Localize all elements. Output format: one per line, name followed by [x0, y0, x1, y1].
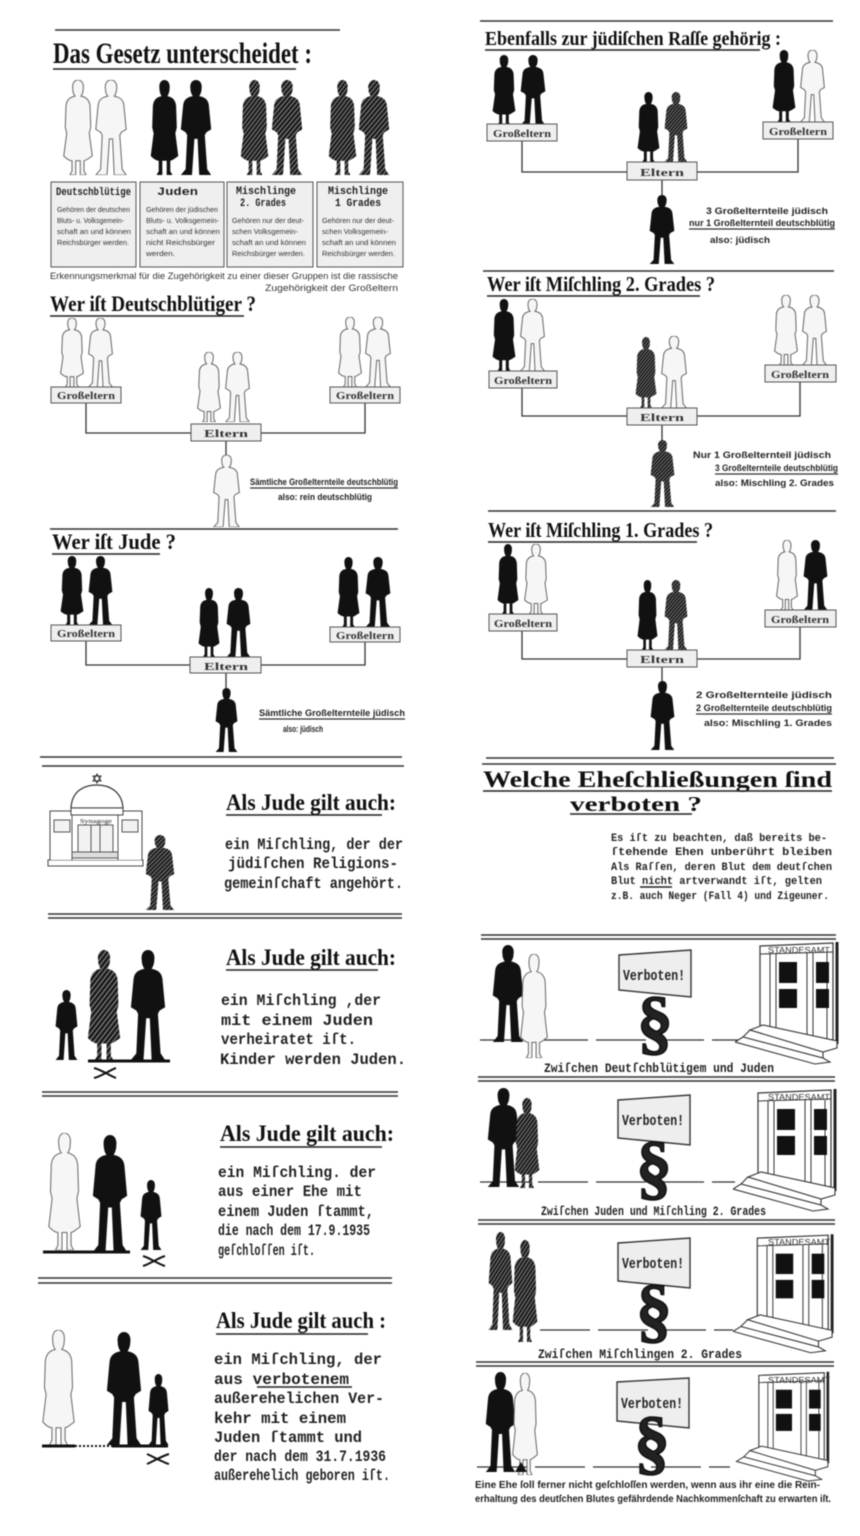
text [224, 836, 403, 893]
text [218, 1164, 376, 1260]
box: Juden: Juden [157, 187, 198, 199]
heading: Als Jude gilt auch: [226, 945, 396, 970]
text: verheiratet iſt. [221, 1031, 356, 1049]
icon: registry office [733, 1089, 835, 1211]
sign: Verboten: Verboten! [622, 1113, 684, 1130]
note text: Als Raſſen, deren Blut dem deutſchen [611, 862, 832, 874]
explanation: 3 Großelternteile jüdisch [706, 206, 828, 216]
box: Juden: werden. [145, 251, 175, 258]
sign: Verboten: § [637, 982, 673, 1062]
box: Mischlinge 2. Grades [227, 182, 313, 267]
text: ein Miſchling. der [218, 1164, 376, 1182]
box: Juden [140, 182, 224, 267]
text: der nach dem 31.7.1936 [214, 1448, 386, 1466]
note text: Blut nicht artverwandt iſt, gelten [611, 876, 822, 888]
text: aus verbotenem [214, 1371, 349, 1389]
box: Mischlinge 1. Grades [317, 182, 403, 267]
explanation: also: rein deutschblütig [278, 492, 372, 502]
explanation: nur 1 Großelternteil deutschblütig [689, 218, 835, 228]
explanation [696, 690, 832, 728]
text: ein Miſchling ,der [221, 992, 381, 1010]
sign: Verboten: Verboten! [621, 1396, 683, 1413]
family tree: Großeltern [493, 128, 551, 140]
sign: Verboten: Verboten! [623, 968, 685, 985]
text: ein Miſchling, der [214, 1351, 382, 1369]
box: Mischlinge 1. Grades: Gehören nur der deut- [322, 218, 395, 225]
heading: Wer iſt Jude ? [52, 529, 176, 554]
explanation: Sämtliche Großelternteile jüdisch [259, 708, 405, 718]
text: mit einem Juden [221, 1012, 373, 1030]
sign: Verboten [618, 1238, 690, 1350]
sign: Verboten [618, 1095, 690, 1207]
caption: Zwiſchen Juden und Miſchling 2. Grades [541, 1205, 766, 1219]
sign: Verboten: § [636, 1270, 672, 1350]
family tree: Großeltern [771, 369, 829, 381]
family tree: Großeltern [769, 126, 827, 138]
box: Mischlinge 2. Grades: schen Volksgemein- [232, 229, 299, 236]
icon: registry office: STANDESAMT [768, 1376, 830, 1385]
sign: Verboten [617, 1378, 689, 1482]
panel: Als Jude gilt auch, religious community [48, 774, 403, 918]
family tree: Großeltern [57, 628, 115, 640]
icon: synagogue: Synagoge [80, 819, 112, 825]
text [220, 992, 406, 1069]
family tree [489, 540, 836, 750]
panel: overview of the law's categories [50, 30, 403, 293]
panel: Wer ist Mischling 1. Grades [486, 518, 836, 758]
caption [475, 1480, 831, 1505]
text: geſchloſſen iſt. [218, 1242, 315, 1260]
caption: erhaltung des deutſchen Blutes gefährdende Nachkommenſchaft zu erwarten iſt. [475, 1494, 831, 1505]
text [214, 1351, 390, 1485]
icon: registry office: STANDESAMT [768, 1238, 830, 1247]
note text: ſtehende Ehen unberührt bleiben [611, 847, 832, 859]
icon: registry office [736, 1372, 830, 1481]
box: Juden: Gehören der jüdischen [146, 207, 218, 214]
panel: marriage case 3 [476, 1232, 834, 1366]
explanation: Sämtliche Großelternteile deutschblütig [250, 477, 398, 487]
heading: Wer iſt Miſchling 1. Grades ? [488, 518, 713, 542]
family tree: Eltern [640, 412, 684, 424]
family tree [489, 295, 836, 507]
sign: Verboten: § [634, 1402, 670, 1482]
box: Juden: nicht Reichsbürger [146, 240, 216, 247]
box: Juden: Bluts- u. Volksgemein- [146, 218, 220, 225]
panel: Ebenfalls zur jüdischen Rasse gehörig [480, 21, 835, 271]
family tree: Großeltern [494, 375, 552, 387]
icon: synagogue [48, 774, 143, 866]
figures: couple [488, 1088, 539, 1188]
family tree: Eltern [640, 654, 684, 666]
box: Mischlinge 1. Grades: Reichsbürger werden. [322, 251, 395, 258]
icon: registry office: STANDESAMT [768, 946, 830, 955]
icon: registry office [735, 942, 837, 1064]
icon: registry office [733, 1234, 832, 1353]
text: jüdiſchen Religions- [228, 855, 398, 873]
heading [483, 767, 832, 816]
explanation: Nur 1 Großelternteil jüdisch [693, 450, 831, 460]
sign: Verboten: Verboten! [622, 1256, 684, 1273]
box: Mischlinge 1. Grades: 1 Grades [335, 198, 381, 210]
family tree: Großeltern [57, 390, 115, 402]
sign: Verboten [619, 950, 691, 1062]
heading: Als Jude gilt auch: [226, 790, 396, 815]
explanation: 3 Großelternteile deutschblütig [715, 463, 838, 473]
family tree: Großeltern [336, 630, 394, 642]
figures: couple [493, 945, 547, 1058]
note on group membership: Erkennungsmerkmal für die Zugehörigkeit zu einer dieser Gruppen ist die rassische [50, 271, 398, 281]
text: die nach dem 17.9.1935 [218, 1222, 370, 1240]
explanation: 2 Großelternteile jüdisch [696, 690, 832, 700]
note on group membership [50, 271, 398, 293]
note text: Es iſt zu beachten, daß bereits be- [611, 833, 827, 845]
heading: Als Jude gilt auch : [216, 1308, 386, 1333]
family tree: Eltern [640, 167, 684, 179]
family tree [51, 556, 400, 752]
text: außerehelich geboren iſt. [214, 1467, 390, 1485]
text: aus einer Ehe mit [218, 1183, 362, 1201]
heading: Als Jude gilt auch: [220, 1121, 394, 1146]
panel: Als Jude gilt auch, married to a Jew [42, 945, 406, 1096]
caption: Zwiſchen Deutſchblütigem und Juden [544, 1061, 774, 1076]
figures [42, 1330, 169, 1464]
text: einem Juden ſtammt, [218, 1203, 374, 1221]
box: Deutschblütige: Reichsbürger werden. [57, 240, 129, 247]
figures: couple [486, 1372, 537, 1475]
panel: Welche Eheschließungen sind verboten [482, 764, 836, 903]
box: Mischlinge 2. Grades: schaft an und können [232, 240, 306, 247]
panel: marriage case 1 [478, 935, 837, 1081]
box: Deutschblütige: Bluts- u. Volksgemein- [57, 218, 125, 225]
caption: Zwiſchen Miſchlingen 2. Grades [538, 1348, 742, 1362]
note on group membership: Zugehörigkeit der Großeltern [265, 283, 398, 293]
note text [611, 833, 832, 903]
text: kehr mit einem [214, 1410, 346, 1428]
family tree [487, 50, 833, 264]
icon: registry office: STANDESAMT [768, 1093, 830, 1102]
box: Mischlinge 2. Grades: Mischlinge [236, 186, 296, 198]
family tree [51, 317, 400, 527]
box: Juden: schaft an und können [146, 229, 220, 236]
explanation: also: jüdisch [283, 724, 323, 734]
figures [43, 1133, 165, 1266]
sign: Verboten: § [636, 1127, 672, 1207]
heading: verboten ? [570, 792, 702, 816]
panel: Wer ist Mischling 2. Grades [487, 272, 838, 511]
heading: Ebenfalls zur jüdiſchen Raſſe gehörig : [485, 28, 781, 50]
panel: Als Jude gilt auch, extramarital birth after 31.7.1936 [42, 1308, 390, 1485]
explanation [259, 708, 405, 734]
figures: child and couple [56, 950, 170, 1078]
explanation [689, 206, 835, 245]
text: ein Miſchling, der der [225, 836, 403, 854]
panel: Wer ist Deutschblütiger [50, 291, 400, 529]
panel: Wer ist Jude [40, 529, 405, 757]
heading: Wer iſt Deutschblütiger ? [50, 291, 256, 316]
family tree: Großeltern [494, 618, 552, 630]
figure: person [146, 835, 174, 910]
box: Mischlinge 1. Grades: Mischlinge [328, 186, 388, 198]
family tree: Eltern [204, 428, 248, 440]
box: Mischlinge 1. Grades: schen Volksgemein- [322, 229, 389, 236]
box: Mischlinge 2. Grades: Gehören nur der deut- [232, 218, 305, 225]
text: Juden ſtammt und [214, 1429, 362, 1447]
family tree: Eltern [204, 661, 248, 673]
text: außerehelichen Ver- [214, 1390, 384, 1408]
box: Deutschblütige: Gehören der deutschen [57, 207, 130, 214]
heading: Welche Eheſchließungen ſind [483, 767, 832, 792]
box: Deutschblütige: schaft an und können [57, 229, 131, 236]
explanation [693, 450, 838, 488]
explanation: also: jüdisch [710, 235, 770, 245]
explanation: 2 Großelternteile deutschblütig [696, 703, 832, 713]
box: Deutschblütige: Deutschblütige [56, 187, 131, 199]
note text: z.B. auch Neger (Fall 4) und Zigeuner. [611, 891, 829, 903]
panel: Als Jude gilt auch, marriage after 17.9.1935 [38, 1121, 394, 1283]
family tree: Großeltern [771, 614, 829, 626]
explanation: also: Mischling 2. Grades [715, 478, 834, 488]
figures: four category pairs [64, 80, 389, 175]
box: Mischlinge 1. Grades: schaft an und können [322, 240, 396, 247]
title: Das Gesetz unterscheidet : [53, 37, 312, 70]
family tree: Großeltern [336, 390, 394, 402]
panel: marriage case 4 [475, 1372, 831, 1505]
heading: Wer iſt Miſchling 2. Grades ? [487, 272, 715, 296]
box: Deutschblütige [51, 182, 136, 267]
box: Mischlinge 2. Grades: 2. Grades [240, 198, 286, 210]
box: Mischlinge 2. Grades: Reichsbürger werden. [232, 251, 305, 258]
panel: marriage case 2 [478, 1088, 835, 1224]
explanation [250, 477, 398, 502]
caption: Eine Ehe ſoll ferner nicht geſchloſſen werden, wenn aus ihr eine die Rein- [475, 1480, 820, 1491]
figures: couple [489, 1232, 537, 1342]
text: gemeinſchaft angehört. [224, 875, 403, 893]
explanation: also: Mischling 1. Grades [704, 718, 832, 728]
text: Kinder werden Juden. [220, 1051, 406, 1069]
